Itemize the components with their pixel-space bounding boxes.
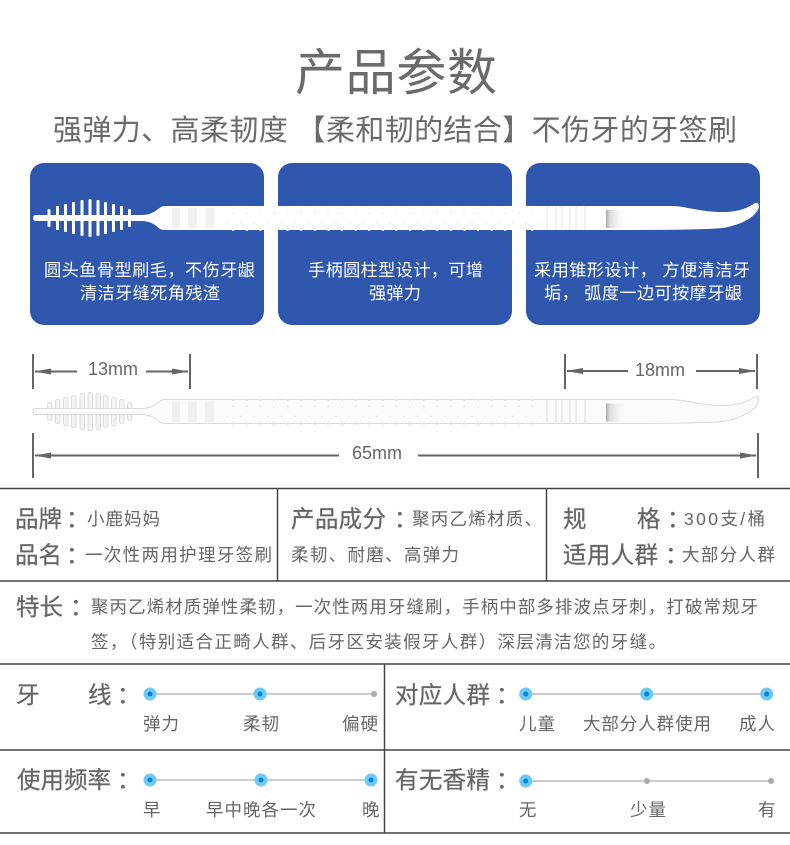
spec: brand and name [15, 506, 272, 568]
rating: floss: 牙 [16, 682, 40, 708]
spec: brand and name: ： [66, 506, 90, 532]
toothpick brush on panels [33, 199, 759, 237]
rating: fragrance [395, 767, 776, 820]
spec: size and audience: 300支/桶 [684, 509, 765, 529]
toothpick outline drawing [33, 392, 759, 430]
dimension: 13mm: 13mm [88, 359, 138, 379]
spec: features [16, 594, 758, 652]
spec: ingredients: 柔韧、耐磨、高弹力 [291, 545, 459, 565]
panel: tapered tip [526, 163, 760, 325]
spec: ingredients: ： [394, 506, 418, 532]
dimension: 65mm [33, 433, 758, 478]
spec: features: ： [70, 594, 94, 620]
panel: handle [278, 163, 512, 325]
panel text: tapered tip: 采用锥形设计， 方便清洁牙 [534, 260, 750, 280]
rating: frequency: ： [117, 767, 140, 793]
spec: brand and name: ： [66, 542, 90, 568]
rating: fragrance: 无 [519, 800, 536, 820]
spec: size and audience: 适用人群 [563, 542, 658, 568]
spec: size and audience: 规 [563, 506, 586, 532]
spec: size and audience: 格 [637, 506, 660, 532]
rating: frequency: 早 [143, 800, 160, 820]
panel: brush head [30, 163, 264, 325]
spec: brand and name: 品名 [15, 542, 62, 568]
spec: ingredients: 产品成分 [291, 506, 386, 532]
panel text: brush head [44, 260, 255, 303]
rating: target users: 儿童 [519, 714, 555, 734]
rating: frequency: 早中晚各一次 [206, 800, 316, 820]
spec: size and audience: ： [667, 506, 690, 532]
spec: size and audience: ： [665, 542, 688, 568]
rating: fragrance: 少量 [630, 800, 666, 820]
spec: features: 特长 [16, 594, 63, 620]
rating: target users: 对应人群 [395, 682, 490, 708]
dimension: 65mm: 65mm [352, 443, 402, 463]
title: 产品参数 [295, 45, 497, 101]
rating: floss: ： [117, 682, 140, 708]
spec: brand and name: 一次性两用护理牙签刷 [85, 545, 272, 565]
dimension: 18mm: 18mm [635, 360, 685, 380]
rating: floss: 弹力 [143, 714, 179, 734]
dimension: 13mm [33, 354, 190, 389]
panel text: handle: 手柄圆柱型设计，可增 [308, 260, 483, 280]
spec: brand and name: 品牌 [15, 506, 62, 532]
rating: frequency: 晚 [362, 800, 380, 820]
rating: fragrance: 有无香精 [395, 767, 490, 793]
panel text: brush head: 圆头鱼骨型刷毛，不伤牙龈 [44, 260, 255, 280]
spec: size and audience [563, 506, 775, 568]
subtitle: 强弹力、高柔韧度 【柔和韧的结合】不伤牙的牙签刷 [53, 114, 737, 147]
spec: size and audience: 大部分人群 [682, 545, 775, 565]
rating: floss: 偏硬 [342, 714, 378, 734]
spec: ingredients [291, 506, 542, 565]
rating: target users [395, 682, 775, 734]
rating: fragrance: ： [496, 767, 520, 793]
rating: fragrance: 有 [758, 800, 776, 820]
rating: frequency: 使用频率 [17, 767, 111, 793]
rating: target users: 大部分人群使用 [583, 714, 711, 734]
rating: floss [16, 682, 378, 734]
panel text: handle: 强弹力 [369, 283, 421, 303]
rating: target users: ： [496, 682, 520, 708]
panel text: tapered tip [534, 260, 750, 303]
dimension: 18mm [565, 354, 757, 389]
rating: floss: 柔韧 [243, 714, 279, 734]
panel text: handle [308, 260, 483, 303]
rating: frequency [17, 767, 380, 820]
spec: features: 聚丙乙烯材质弹性柔韧，一次性两用牙缝刷，手柄中部多排波点牙刺，打破常规牙 [91, 597, 758, 617]
rating: floss: 线 [88, 682, 112, 708]
panel text: tapered tip: 垢， 弧度一边可按摩牙龈 [544, 283, 742, 303]
rating: target users: 成人 [739, 714, 775, 734]
spec: ingredients: 聚丙乙烯材质、 [412, 509, 542, 529]
spec: features: 签，（特别适合正畸人群、后牙区安装假牙人群）深层清洁您的牙缝。 [91, 632, 666, 652]
spec: brand and name: 小鹿妈妈 [87, 509, 160, 529]
panel text: brush head: 清洁牙缝死角残渣 [80, 283, 220, 303]
